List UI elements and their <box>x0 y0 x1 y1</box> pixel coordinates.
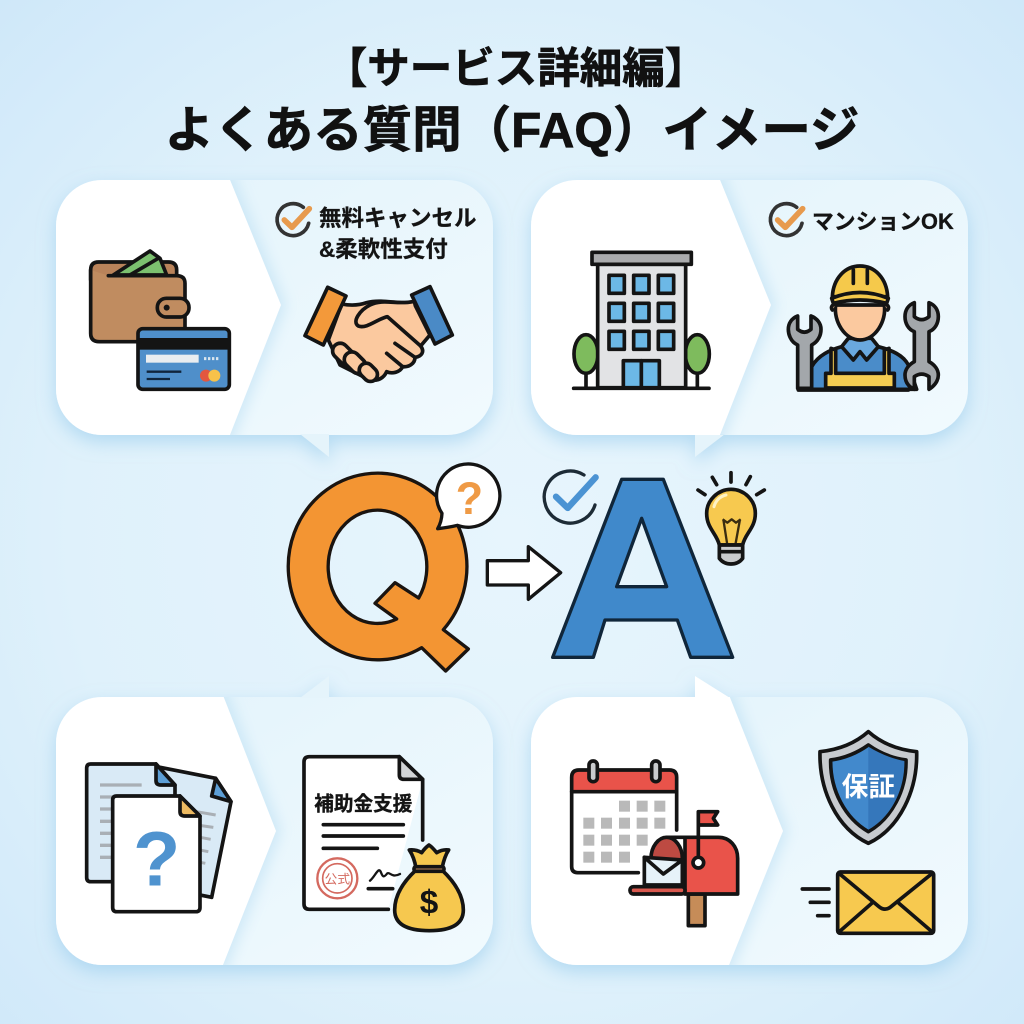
title: よくある質問（FAQ）イメージ <box>165 103 859 158</box>
icon: subsidy document with money bag: 補助金支援 <box>314 793 413 815</box>
icon: guarantee shield: 保証 <box>842 772 895 802</box>
panel 2 white chevron <box>531 180 778 435</box>
title: 【サービス詳細編】 <box>325 46 707 93</box>
panel 4 white chevron <box>531 697 790 965</box>
panel: payment question and answer <box>40 170 493 457</box>
icon: check mark <box>277 204 309 236</box>
icon: question speech bubble <box>437 464 500 529</box>
icon: subsidy document with money bag: $ <box>420 884 439 921</box>
panel: schedule question and answer <box>510 676 968 975</box>
icon: subsidy document with money bag <box>304 757 463 931</box>
icon: subsidy document with money bag: 公式 <box>325 872 350 886</box>
icon: worker with wrenches <box>788 266 938 390</box>
answer label: 無料キャンセル <box>319 206 477 231</box>
panel 3 white chevron <box>56 697 282 965</box>
letter A <box>553 479 733 657</box>
icon: question speech bubble: ? <box>456 473 483 524</box>
icon: check mark <box>770 204 803 236</box>
panel: apartment question and answer <box>510 170 968 457</box>
icon: documents with question mark: ? <box>133 816 180 902</box>
icon: documents with question mark <box>87 764 231 912</box>
panel 3 card <box>56 676 493 965</box>
answer label <box>319 206 477 262</box>
central Q and A <box>288 464 764 671</box>
panel: documents question and answer <box>40 676 493 975</box>
panel 4 card <box>531 676 968 965</box>
answer label: マンションOK <box>812 209 954 234</box>
icon: calendar and mailbox <box>572 761 738 926</box>
arrow <box>487 547 561 599</box>
icon: handshake <box>305 287 452 384</box>
panel 1 white chevron <box>56 180 288 435</box>
icon: light bulb <box>698 473 764 564</box>
icon: blue check <box>544 471 596 523</box>
title <box>165 46 859 158</box>
panel 2 card <box>531 180 968 457</box>
letter Q <box>288 473 468 671</box>
icon: apartment building <box>574 252 709 388</box>
icon: guarantee shield <box>820 732 917 843</box>
icon: wallet and credit card <box>91 251 229 389</box>
answer label: &柔軟性支付 <box>319 237 448 262</box>
panel 1 card <box>56 180 493 457</box>
icon: sent envelope <box>802 872 934 933</box>
